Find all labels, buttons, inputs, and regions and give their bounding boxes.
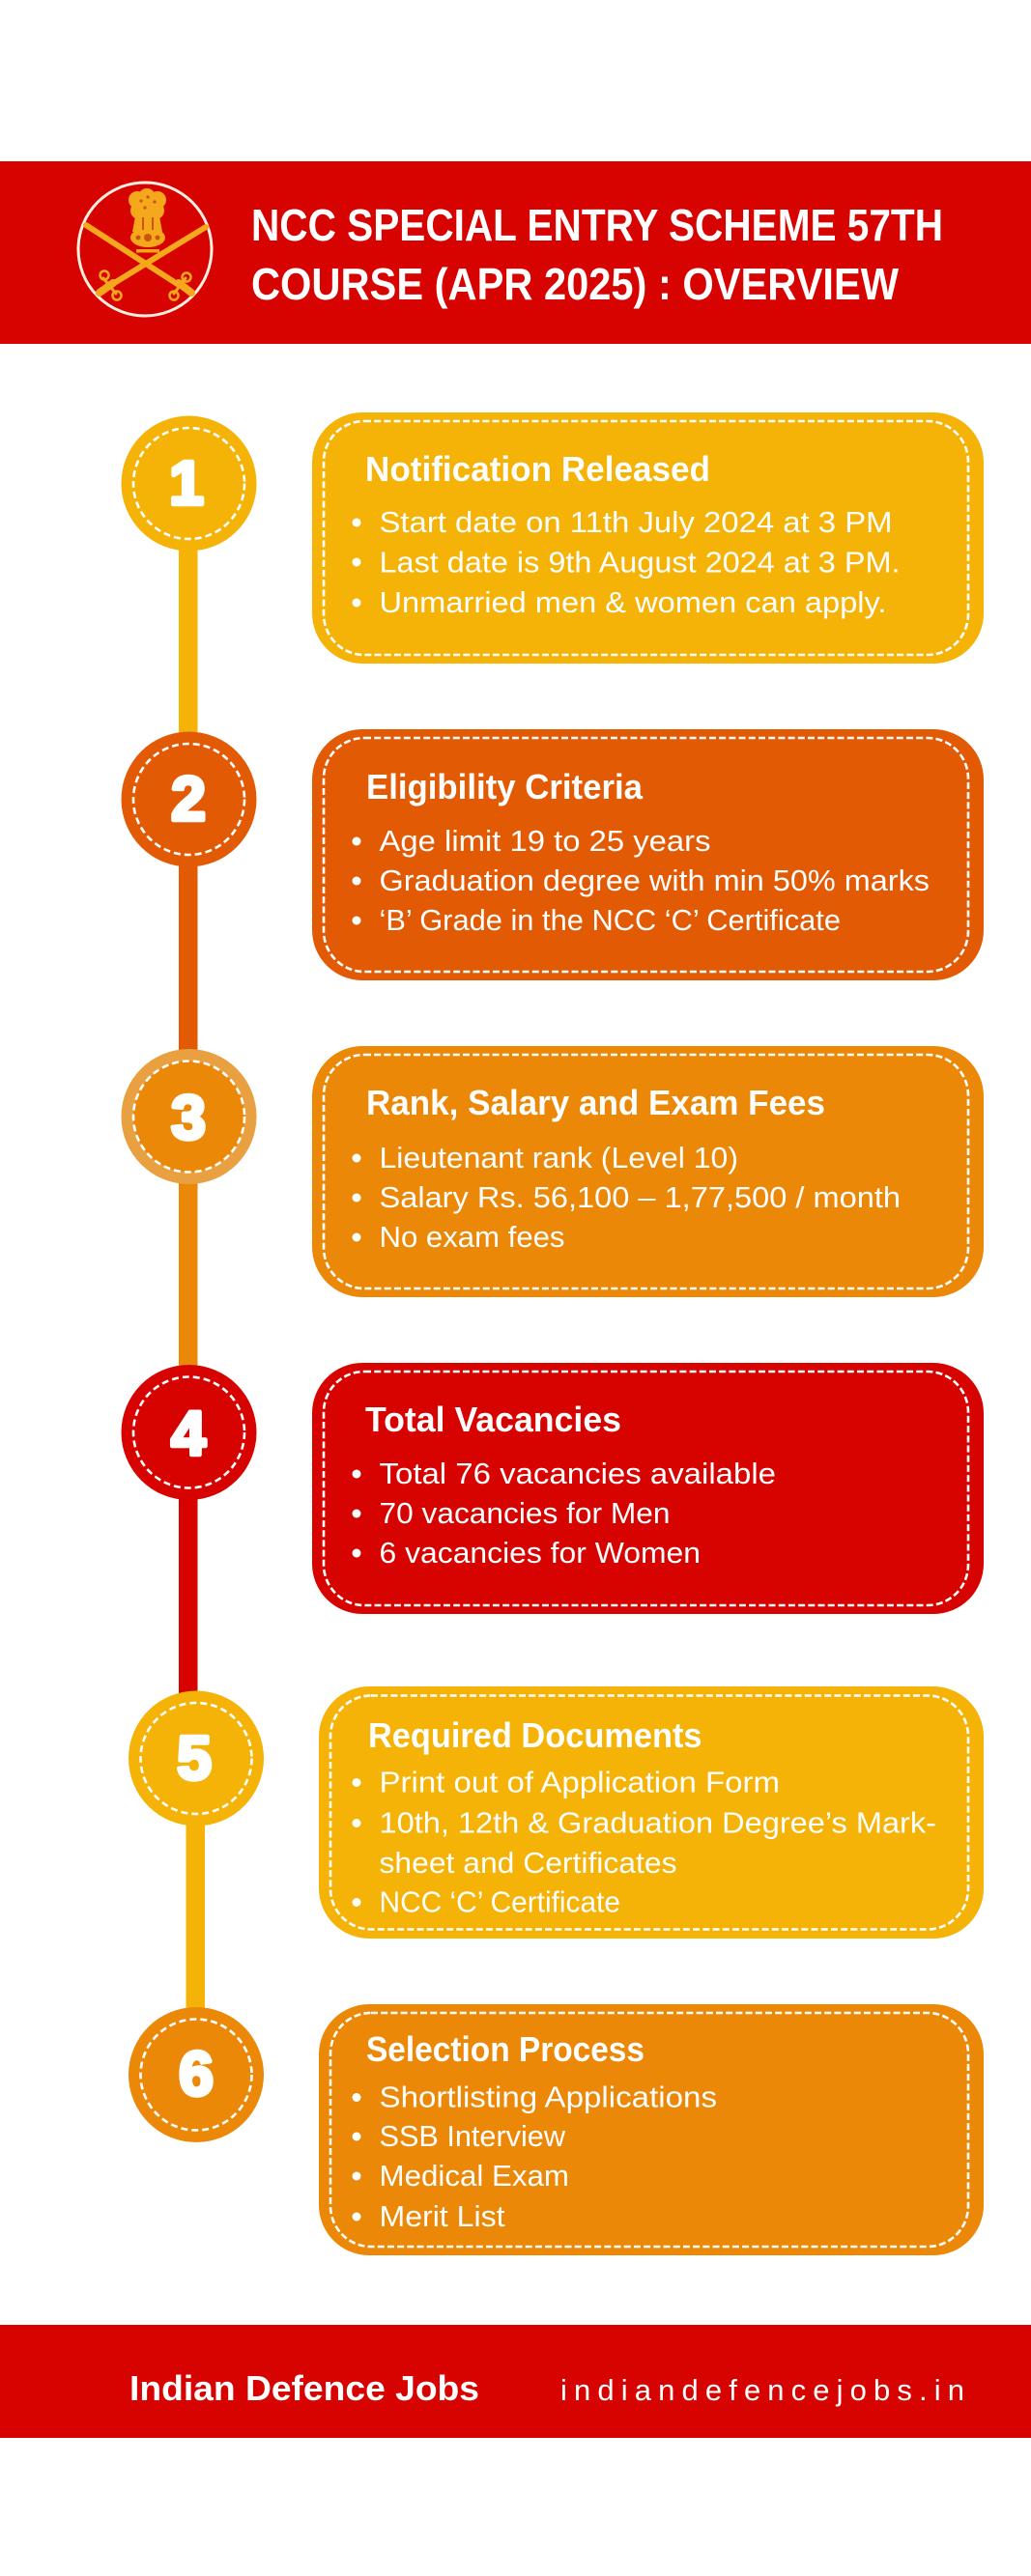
list: document details: sheet and Certificates bbox=[379, 1846, 676, 1880]
list: document details bbox=[352, 1766, 936, 1918]
step marker 3: 3 bbox=[171, 1083, 206, 1152]
heading: eligibility criteria: Eligibility Criteria bbox=[366, 767, 644, 807]
step marker 4: 4 bbox=[171, 1399, 206, 1468]
list: notification details: Unmarried men & women can apply. bbox=[379, 585, 887, 619]
list: document details: NCC ‘C’ Certificate bbox=[379, 1885, 620, 1918]
panel: total vacancies bbox=[312, 1363, 984, 1614]
footer brand name: Indian Defence Jobs bbox=[129, 2368, 479, 2408]
list: vacancy details bbox=[352, 1457, 776, 1570]
list: document details: Print out of Application Form bbox=[379, 1766, 780, 1798]
list: selection stages: Merit List bbox=[379, 2199, 505, 2233]
step marker 6 bbox=[129, 2007, 264, 2142]
list: vacancy details: Total 76 vacancies available bbox=[379, 1457, 776, 1490]
list: eligibility details: ‘B’ Grade in the NCC ‘C’ Certificate bbox=[379, 903, 841, 937]
step marker 5: 5 bbox=[177, 1723, 212, 1793]
list: selection stages: Shortlisting Applications bbox=[379, 2081, 717, 2113]
step marker 5 bbox=[129, 1690, 264, 1826]
heading: required documents: Required Documents bbox=[368, 1715, 702, 1755]
list: notification details: Last date is 9th August 2024 at 3 PM. bbox=[379, 545, 901, 580]
panel: notification released bbox=[312, 412, 984, 664]
list: selection stages: Medical Exam bbox=[379, 2159, 569, 2193]
header banner bbox=[0, 161, 1031, 344]
timeline connector 2 bbox=[179, 862, 197, 1053]
footer website: indiandefencejobs.in bbox=[560, 2373, 964, 2407]
panel: required documents bbox=[319, 1686, 984, 1939]
list: eligibility details bbox=[352, 824, 930, 937]
panel: selection process bbox=[319, 2004, 984, 2255]
heading: rank, salary and exam fees: Rank, Salary and Exam Fees bbox=[366, 1083, 825, 1122]
footer banner bbox=[0, 2325, 1031, 2438]
panel: rank, salary and exam fees bbox=[312, 1046, 984, 1297]
heading: notification released: Notification Released bbox=[365, 449, 710, 489]
step marker 1 bbox=[122, 415, 257, 551]
panel: eligibility criteria bbox=[312, 729, 984, 980]
heading: selection process: Selection Process bbox=[366, 2029, 644, 2069]
step marker 1: 1 bbox=[169, 448, 204, 518]
step marker 4 bbox=[122, 1365, 257, 1500]
step marker 2: 2 bbox=[171, 764, 206, 834]
list: selection stages bbox=[352, 2081, 717, 2233]
icon: army emblem bbox=[78, 183, 212, 316]
timeline connector 4 bbox=[179, 1495, 197, 1694]
timeline connector 1 bbox=[179, 546, 197, 737]
timeline connector 5 bbox=[186, 1822, 205, 2011]
list: notification details: Start date on 11th July 2024 at 3 PM bbox=[379, 505, 893, 539]
list: selection stages: SSB Interview bbox=[379, 2119, 566, 2153]
step marker 3 bbox=[122, 1049, 257, 1184]
list: document details: 10th, 12th & Graduation Degree’s Mark- bbox=[379, 1806, 936, 1839]
title: COURSE (APR 2025) : OVERVIEW bbox=[251, 259, 900, 309]
step marker 6: 6 bbox=[179, 2039, 214, 2109]
step marker 2 bbox=[122, 732, 257, 867]
list: rank and salary details: Salary Rs. 56,100 – 1,77,500 / month bbox=[379, 1180, 901, 1214]
list: eligibility details: Age limit 19 to 25 years bbox=[379, 824, 711, 858]
list: rank and salary details: No exam fees bbox=[379, 1220, 564, 1254]
list: vacancy details: 6 vacancies for Women bbox=[379, 1536, 701, 1570]
list: vacancy details: 70 vacancies for Men bbox=[379, 1496, 671, 1530]
list: eligibility details: Graduation degree with min 50% marks bbox=[379, 863, 930, 897]
timeline connector 3 bbox=[179, 1180, 197, 1369]
list: notification details bbox=[352, 505, 901, 619]
title: NCC SPECIAL ENTRY SCHEME 57TH bbox=[251, 200, 943, 250]
heading: total vacancies: Total Vacancies bbox=[365, 1400, 621, 1439]
list: rank and salary details: Lieutenant rank (Level 10) bbox=[379, 1141, 738, 1175]
title bbox=[251, 200, 943, 309]
list: rank and salary details bbox=[352, 1141, 901, 1254]
